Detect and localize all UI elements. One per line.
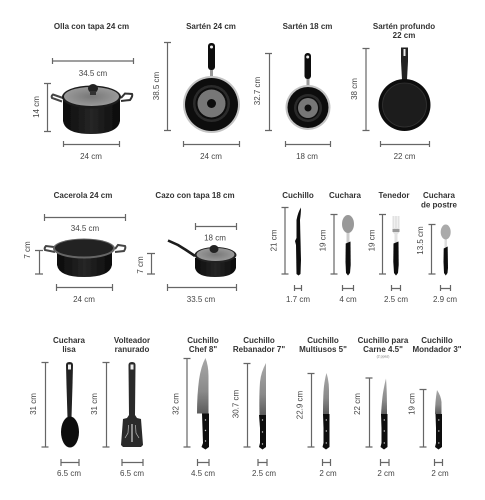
icon: carne	[380, 378, 388, 450]
dimension: cuchara de postre ancho: 2.9 cm	[433, 295, 457, 304]
icon: sartén 18	[286, 53, 330, 130]
panel: tenedor	[368, 191, 409, 304]
dimension: tenedor ancho: 2.5 cm	[384, 295, 408, 304]
heading: cuchara de postre: Cuchara	[423, 191, 456, 200]
dimension: cazo largo total: 33.5 cm	[187, 295, 216, 304]
icon: cuchillo chef	[197, 358, 209, 450]
heading: cuchara lisa	[53, 336, 86, 354]
dimension: olla ancho total: 34.5 cm	[79, 69, 108, 78]
icon: cazo	[168, 240, 236, 277]
icon: volteador	[121, 362, 143, 447]
dimension: cazo altura: 7 cm	[136, 256, 145, 274]
dimension: cuchara lisa ancho: 6.5 cm	[57, 469, 81, 478]
dimension: cuchara ancho: 4 cm	[339, 295, 357, 304]
icon: cuchara de postre	[441, 224, 451, 276]
dimension: mondador largo: 19 cm	[408, 393, 416, 415]
dimension: sartén 18 largo: 32.7 cm	[253, 76, 262, 105]
panel: cuchara	[318, 191, 362, 304]
icon: multiusos	[322, 373, 330, 450]
heading: sartén 24: Sartén 24 cm	[186, 22, 236, 31]
heading: sartén profundo	[373, 22, 435, 40]
dimension: carne largo: 22 cm	[353, 393, 362, 415]
heading: cuchillo para carne: (2 ppas)	[377, 354, 389, 358]
icon: cuchara lisa	[61, 362, 79, 448]
heading: cuchara de postre: de postre	[421, 200, 458, 210]
heading: cuchillo mondador	[412, 336, 462, 354]
heading: cuchillo para carne	[358, 336, 409, 358]
heading: cacerola: Cacerola 24 cm	[54, 191, 112, 200]
dimension: rebanador largo	[232, 364, 250, 447]
dimension: cazo diámetro: 18 cm	[204, 234, 226, 242]
heading: cuchillo mondador: Cuchillo	[421, 336, 453, 345]
dimension: cacerola altura: 7 cm	[23, 241, 32, 259]
dimension: cuchara lisa largo: 31 cm	[29, 393, 38, 415]
heading: cuchillo rebanador	[233, 336, 285, 354]
heading: sartén profundo: 22 cm	[393, 31, 415, 40]
panel: cuchillo para carne	[353, 336, 409, 478]
dimension: mondador largo	[408, 390, 426, 447]
dimension: cuchara lisa ancho	[57, 459, 81, 478]
dimension: cacerola diámetro: 24 cm	[73, 295, 95, 304]
heading: cuchillo multiusos: Cuchillo	[307, 336, 339, 345]
heading: cuchillo mondador: Mondador 3"	[412, 345, 462, 354]
panel: cazo con tapa	[136, 191, 236, 304]
icon: tenedor	[392, 216, 400, 276]
heading: cuchillo rebanador: Cuchillo	[243, 336, 275, 345]
panel: cuchillo rebanador	[232, 336, 285, 478]
dimension: multiusos ancho	[319, 459, 337, 478]
heading: tenedor: Tenedor	[379, 191, 409, 200]
dimension: carne ancho: 2 cm	[377, 469, 395, 478]
dimension: sartén 24 diámetro: 24 cm	[200, 152, 222, 161]
panel: cuchillo mondador	[408, 336, 462, 478]
heading: volteador ranurado: ranurado	[115, 345, 149, 354]
panel: sartén profundo	[350, 22, 435, 161]
dimension: carne ancho	[377, 459, 395, 478]
dimension: sartén profundo diámetro: 22 cm	[394, 152, 416, 161]
panel: olla con tapa	[32, 22, 134, 161]
dimension: rebanador largo: 30.7 cm	[232, 389, 240, 418]
heading: cuchillo chef: Chef 8"	[189, 345, 217, 354]
dimension: cuchara lisa largo	[29, 362, 48, 447]
panel: cuchara lisa	[29, 336, 86, 478]
dimension: volteador ancho: 6.5 cm	[120, 469, 144, 478]
dimension: cuchillo ancho: 1.7 cm	[286, 295, 310, 304]
heading: volteador ranurado: Volteador	[114, 336, 150, 345]
dimension: volteador ancho	[120, 459, 144, 478]
heading: cazo: Cazo con tapa 18 cm	[155, 191, 235, 200]
icon: rebanador	[259, 363, 266, 450]
dimension: cuchillo chef largo: 32 cm	[172, 393, 180, 415]
heading: sartén 18: Sartén 18 cm	[283, 22, 332, 31]
heading: cuchillo chef	[187, 336, 219, 354]
dimension: cuchillo chef ancho: 4.5 cm	[191, 469, 215, 478]
panel: cuchillo de mesa	[270, 191, 314, 304]
dimension: rebanador ancho	[252, 459, 276, 478]
dimension: mondador ancho	[431, 459, 449, 478]
dimension: multiusos ancho: 2 cm	[319, 469, 337, 478]
dimension: sartén 18 diámetro: 18 cm	[296, 152, 318, 161]
heading: cuchillo: Cuchillo	[282, 191, 314, 200]
heading: sartén profundo: Sartén profundo	[373, 22, 435, 31]
dimension: cuchillo largo: 21 cm	[270, 229, 278, 251]
heading: cuchara: Cuchara	[329, 191, 362, 200]
heading: cuchillo rebanador: Rebanador 7"	[233, 345, 285, 354]
dimension: cuchara de postre largo: 13.5 cm	[416, 226, 425, 255]
heading: cuchillo multiusos	[299, 336, 347, 354]
heading: olla: Olla con tapa 24 cm	[54, 22, 129, 31]
dimension: volteador largo	[90, 362, 110, 447]
panel: volteador ranurado	[90, 336, 150, 478]
panel: cacerola	[23, 191, 126, 304]
dimension: multiusos largo: 22.9 cm	[296, 390, 304, 419]
icon: sartén profundo	[378, 48, 430, 131]
panel: cuchillo multiusos	[296, 336, 347, 478]
panel: cuchara de postre	[416, 191, 458, 304]
heading: cuchara lisa: Cuchara	[53, 336, 86, 345]
dimension: cuchillo chef ancho	[191, 459, 215, 478]
dimension: volteador largo: 31 cm	[90, 393, 99, 415]
heading: cuchara lisa: lisa	[62, 345, 76, 354]
dimension: olla diámetro: 24 cm	[80, 152, 102, 161]
icon: olla	[52, 84, 132, 134]
heading: cuchillo chef: Cuchillo	[187, 336, 219, 345]
icon: cacerola	[45, 238, 125, 277]
dimension: mondador ancho: 2 cm	[431, 469, 449, 478]
dimension: cacerola ancho total: 34.5 cm	[71, 224, 100, 233]
dimension: olla altura: 14 cm	[32, 96, 41, 118]
dimension: carne largo	[353, 378, 372, 447]
icon: cuchara	[342, 215, 354, 276]
dimension: sartén 24 largo: 38.5 cm	[152, 71, 161, 100]
panel: sartén 24	[152, 22, 240, 161]
icon: cuchillo	[295, 208, 301, 276]
icon: mondador	[435, 390, 442, 450]
dimension: rebanador ancho: 2.5 cm	[252, 469, 276, 478]
heading: volteador ranurado	[114, 336, 150, 354]
icon: sartén 24	[183, 43, 240, 133]
dimension: cuchara largo: 19 cm	[318, 229, 328, 251]
heading: cuchillo para carne: Carne 4.5"	[363, 345, 403, 354]
panel: cuchillo chef	[172, 336, 219, 478]
dimension: multiusos largo	[296, 374, 314, 447]
panel: sartén 18	[253, 22, 332, 161]
dimension: cuchillo chef largo	[172, 358, 190, 447]
heading: cuchillo para carne: Cuchillo para	[358, 336, 409, 345]
dimension: tenedor largo: 19 cm	[368, 229, 376, 251]
heading: cuchara de postre	[421, 191, 458, 210]
heading: cuchillo multiusos: Multiusos 5"	[299, 345, 347, 354]
dimension: sartén profundo largo: 38 cm	[350, 78, 359, 100]
